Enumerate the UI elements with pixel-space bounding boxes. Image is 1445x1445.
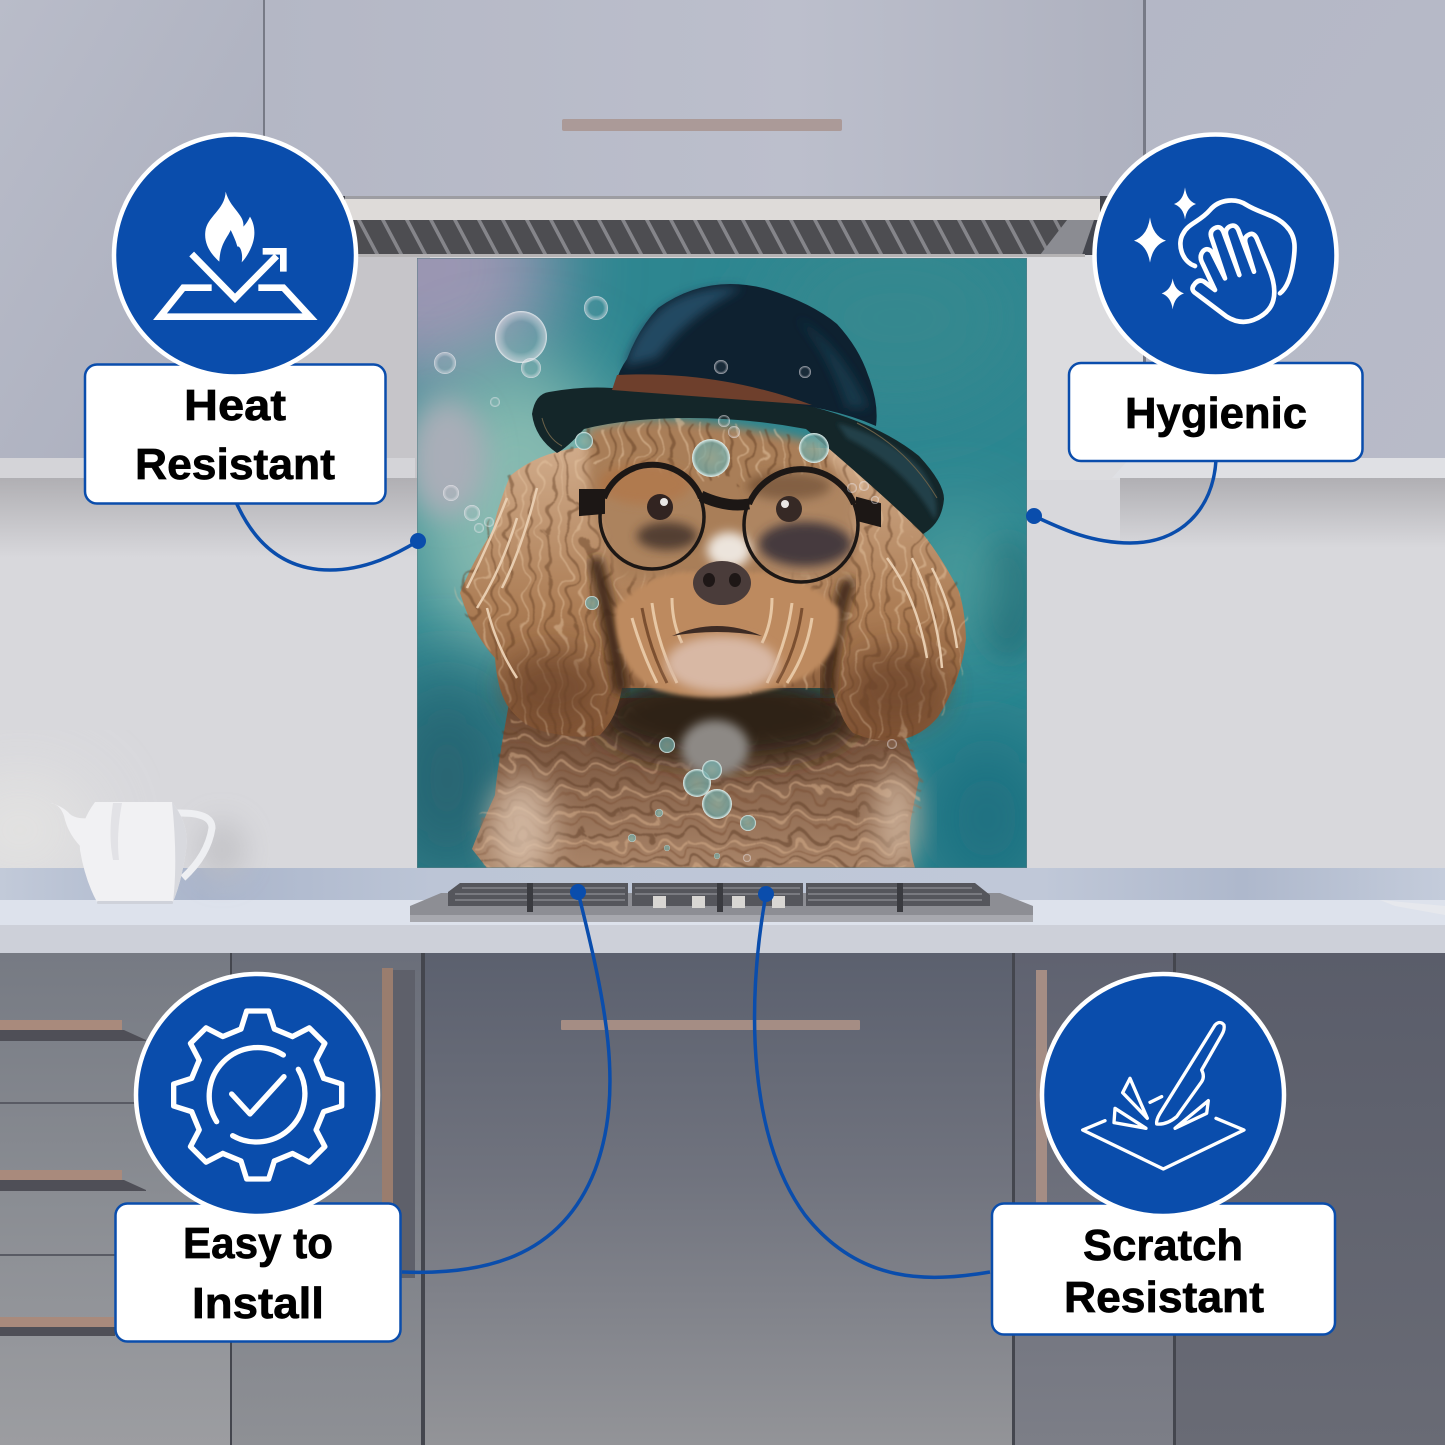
wall backsplash: [0, 255, 1445, 870]
anchor dot: scratch resistant: [758, 886, 774, 902]
label text: resistant: Resistant: [1064, 1273, 1264, 1322]
upper cabinet right: [1146, 0, 1445, 458]
dog head and ears: [460, 448, 966, 741]
dog nose: [693, 561, 751, 605]
connector: easy to install: [402, 892, 610, 1272]
dog face: [587, 419, 857, 698]
bowler hat: [532, 284, 944, 534]
icon: knife scratching surface: [1083, 1022, 1244, 1169]
callout: heat resistant: [85, 134, 386, 504]
label box: [116, 1204, 400, 1342]
label text: scratch: Scratch: [1083, 1221, 1243, 1270]
white teapot: [50, 802, 246, 904]
icon: gear with check mark: [174, 1011, 342, 1179]
anchor dot: easy to install: [570, 884, 586, 900]
gas hob: [410, 883, 1033, 922]
dog eyes: [647, 494, 802, 522]
painting background: [418, 258, 1026, 868]
label box: [992, 1204, 1335, 1334]
label text: easy to: Easy to: [183, 1219, 333, 1268]
label text: install: Install: [192, 1279, 324, 1328]
upper cabinet centre: [263, 0, 265, 196]
callout: scratch resistant: [992, 974, 1335, 1334]
range hood: [345, 196, 1100, 257]
connector: hygienic: [1034, 460, 1216, 543]
dog painting: [417, 258, 1027, 868]
callout: hygienic: [1069, 134, 1362, 461]
lower cabinets: [0, 953, 1445, 1445]
icon circle: [1042, 974, 1284, 1216]
icon circle: [1094, 134, 1336, 376]
painting edge: [417, 258, 1027, 868]
label text: heat: Heat: [184, 381, 286, 430]
soap bubbles: [434, 296, 897, 862]
connector: scratch resistant: [755, 894, 990, 1277]
label text: resistant: Resistant: [135, 440, 335, 489]
anchor dot: heat resistant: [410, 533, 426, 549]
teal bubbles on dog: [575, 432, 829, 859]
cabinet handle top: [562, 119, 842, 131]
dog chest fur: [472, 670, 919, 878]
label box: [1069, 363, 1362, 461]
countertop: [0, 868, 1445, 953]
round glasses: [580, 465, 880, 582]
icon: flame on surface: [160, 192, 310, 317]
connector: heat resistant: [236, 502, 418, 570]
icon circle: [136, 974, 378, 1216]
anchor dot: hygienic: [1026, 508, 1042, 524]
label text: hygienic: Hygienic: [1125, 389, 1307, 438]
callout: easy to install: [116, 974, 400, 1342]
upper cabinet left: [0, 0, 263, 458]
icon: hand wiping with sparkles: [1134, 187, 1295, 322]
icon circle: [114, 134, 356, 376]
label box: [85, 364, 386, 504]
